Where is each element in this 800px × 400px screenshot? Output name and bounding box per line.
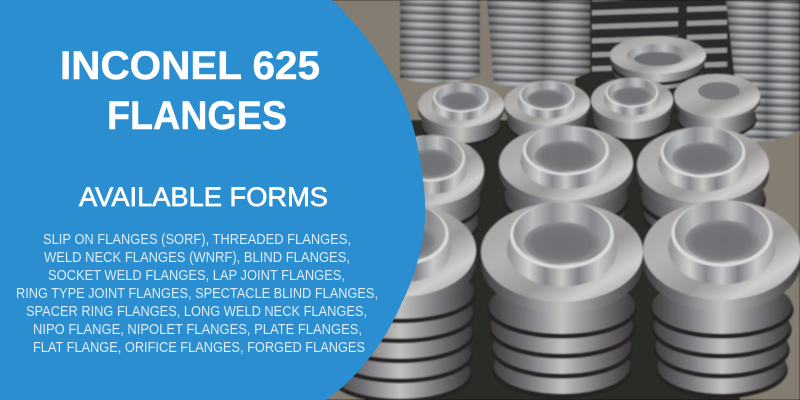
list of flange forms: [16, 232, 378, 356]
list of flange forms: FLAT FLANGE, ORIFICE FLANGES, FORGED FLANGES: [33, 340, 365, 356]
heading: available forms: AVAILABLE FORMS: [79, 182, 328, 212]
list of flange forms: RING TYPE JOINT FLANGES, SPECTACLE BLIND FLANGES,: [16, 286, 378, 302]
photo: stacked metal flanges: [326, 0, 800, 400]
title: [60, 44, 320, 138]
title: INCONEL 625: [60, 44, 320, 88]
list of flange forms: SOCKET WELD FLANGES, LAP JOINT FLANGES,: [48, 268, 345, 284]
blue curved panel: [0, 0, 425, 400]
list of flange forms: NIPO FLANGE, NIPOLET FLANGES, PLATE FLANGES,: [33, 322, 362, 338]
list of flange forms: WELD NECK FLANGES (WNRF), BLIND FLANGES,: [44, 250, 350, 266]
title: FLANGES: [107, 94, 287, 138]
list of flange forms: SPACER RING FLANGES, LONG WELD NECK FLANGES,: [26, 304, 367, 320]
list of flange forms: SLIP ON FLANGES (SORF), THREADED FLANGES,: [43, 232, 351, 248]
